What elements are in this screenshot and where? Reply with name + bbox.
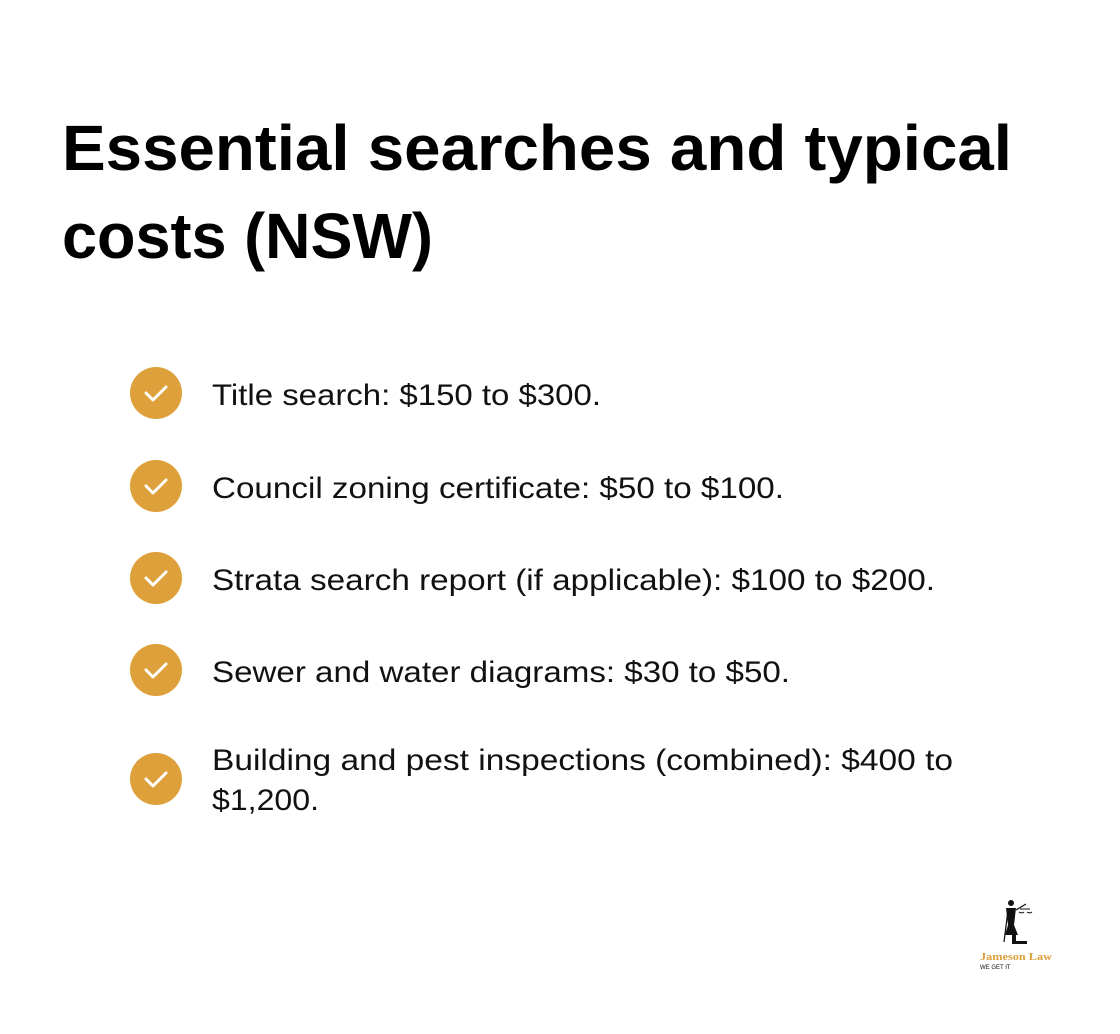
item: council zoning: Council zoning certificate: $50 to $100. xyxy=(212,472,784,505)
item: building and pest: Building and pest inspections (combined): $400 to xyxy=(212,744,953,777)
item: title search: Title search: $150 to $300. xyxy=(212,379,601,412)
item: sewer: Sewer and water diagrams: $30 to $50. xyxy=(212,656,790,689)
title: costs (NSW) xyxy=(62,200,433,272)
icon: lady justice xyxy=(1004,900,1032,944)
list of searches xyxy=(130,367,953,817)
title xyxy=(62,112,1012,272)
item: council zoning xyxy=(130,460,784,512)
item: building and pest: $1,200. xyxy=(212,784,319,817)
item: strata xyxy=(130,552,935,604)
item: building and pest xyxy=(130,744,953,817)
item: sewer xyxy=(130,644,790,696)
text: brand name: Jameson Law xyxy=(980,952,1053,963)
logo: Jameson Law: WE GET IT xyxy=(980,965,1011,971)
title: Essential searches and typical xyxy=(62,112,1012,184)
item: strata: Strata search report (if applicable): $100 to $200. xyxy=(212,564,935,597)
item: title search xyxy=(130,367,601,419)
logo: Jameson Law xyxy=(980,900,1053,971)
